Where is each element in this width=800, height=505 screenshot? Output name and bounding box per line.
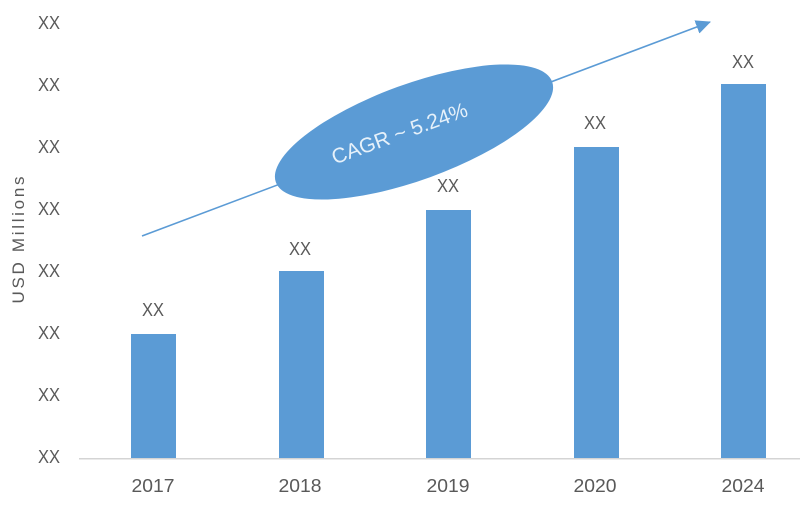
x-axis line <box>79 458 800 460</box>
bar value labels: XX <box>142 300 164 320</box>
x-axis year labels: 2017 <box>132 476 174 496</box>
y-axis labels: XX <box>38 447 60 467</box>
y-axis labels <box>38 13 60 467</box>
y-axis labels: XX <box>38 261 60 281</box>
x-axis year labels <box>132 476 764 496</box>
x-axis year labels: 2019 <box>426 476 470 496</box>
y-axis title: USD Millions <box>9 176 28 304</box>
y-axis labels: XX <box>38 323 60 343</box>
bar value labels: XX <box>289 239 311 259</box>
y-axis labels: XX <box>38 199 60 219</box>
x-axis year labels: 2018 <box>278 476 322 496</box>
bar value labels: XX <box>584 113 606 133</box>
y-axis labels: XX <box>38 75 60 95</box>
CAGR ellipse callout: CAGR ~ 5.24% <box>329 99 471 169</box>
bar value labels: XX <box>732 52 754 72</box>
growth arrow <box>142 22 710 236</box>
CAGR ellipse callout <box>259 37 569 227</box>
y-axis labels: XX <box>38 13 60 33</box>
y-axis labels: XX <box>38 385 60 405</box>
bars <box>131 84 766 458</box>
x-axis year labels: 2020 <box>574 476 616 496</box>
x-axis year labels: 2024 <box>722 476 764 496</box>
bar value labels <box>142 52 754 320</box>
y-axis labels: XX <box>38 137 60 157</box>
bar value labels: XX <box>437 176 459 196</box>
